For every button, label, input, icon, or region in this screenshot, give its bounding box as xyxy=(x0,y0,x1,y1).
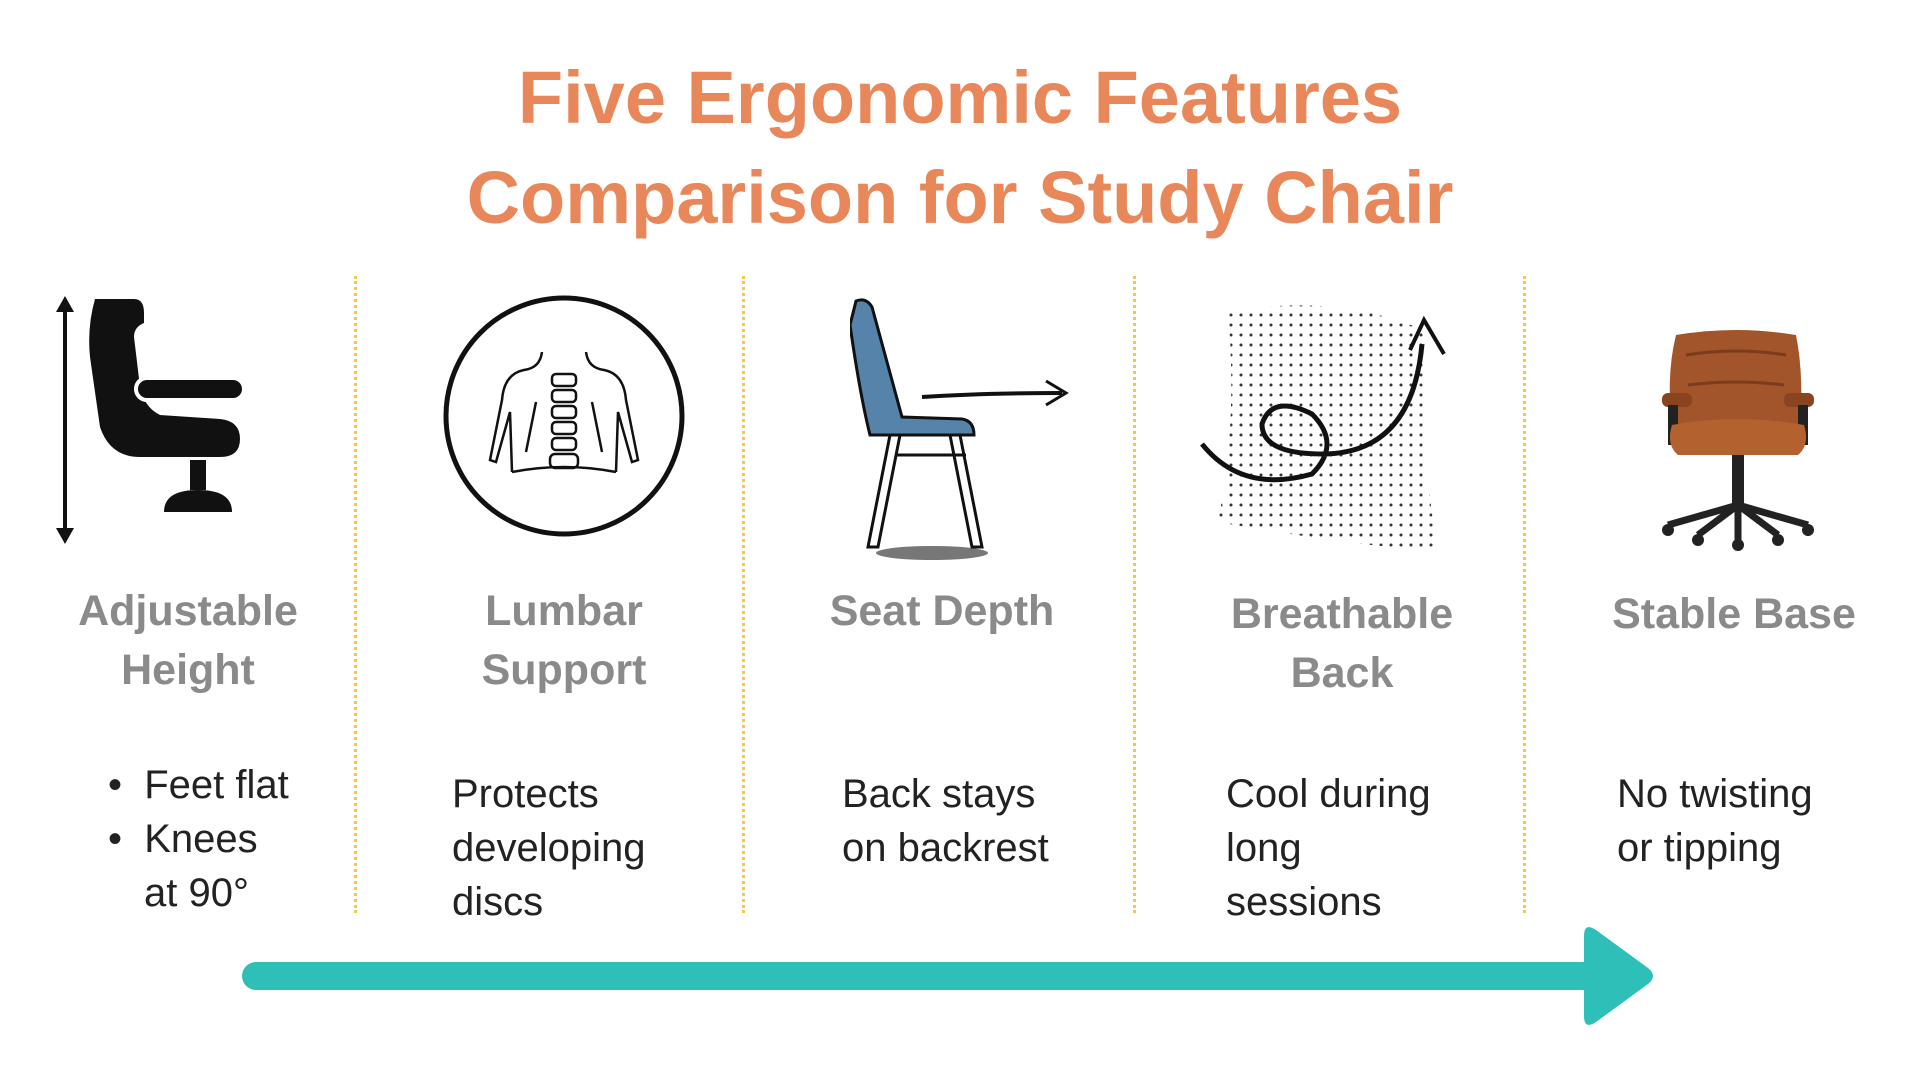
heading: Adjustable Height: Height xyxy=(121,646,255,694)
title: Five Ergonomic Features xyxy=(518,56,1402,139)
text: adjustable height bullets: • Feet flat xyxy=(108,763,289,807)
title: Comparison for Study Chair xyxy=(467,156,1453,239)
text: adjustable height bullets: at 90° xyxy=(144,871,249,915)
icon: lumbar spine circle xyxy=(444,296,684,536)
icon: brown office chair xyxy=(1662,330,1814,551)
heading: Lumbar Support: Support xyxy=(482,646,646,694)
heading: Adjustable Height: Adjustable xyxy=(78,587,298,635)
icon: seat depth chair xyxy=(850,298,1069,560)
text: breathable back xyxy=(1226,772,1431,924)
text: stable base: or tipping xyxy=(1617,826,1782,870)
heading: Stable Base: Stable Base xyxy=(1612,590,1856,638)
heading: Seat Depth: Seat Depth xyxy=(830,587,1054,635)
heading: Lumbar Support xyxy=(482,587,646,694)
icon: breathable mesh with airflow xyxy=(1200,305,1446,546)
text: lumbar support: developing xyxy=(452,826,646,870)
text: stable base: No twisting xyxy=(1617,772,1813,816)
heading: Breathable Back: Back xyxy=(1291,649,1393,697)
text: stable base xyxy=(1617,772,1813,870)
text: seat depth: Back stays xyxy=(842,772,1035,816)
text: seat depth: on backrest xyxy=(842,826,1049,870)
text: breathable back: Cool during xyxy=(1226,772,1431,816)
text: lumbar support xyxy=(452,772,646,924)
text: adjustable height bullets: • Knees xyxy=(108,817,258,861)
icon: adjustable height chair xyxy=(56,296,242,544)
arrow: teal progression xyxy=(242,927,1653,1025)
heading: Breathable Back: Breathable xyxy=(1231,590,1453,638)
text: breathable back: long xyxy=(1226,826,1302,870)
text: seat depth xyxy=(842,772,1049,870)
text: lumbar support: discs xyxy=(452,880,543,924)
heading: Breathable Back xyxy=(1231,590,1453,697)
title xyxy=(467,56,1453,239)
heading: Adjustable Height xyxy=(78,587,298,694)
heading: Lumbar Support: Lumbar xyxy=(485,587,643,635)
text: adjustable height bullets xyxy=(108,763,289,915)
text: breathable back: sessions xyxy=(1226,880,1382,924)
text: lumbar support: Protects xyxy=(452,772,599,816)
